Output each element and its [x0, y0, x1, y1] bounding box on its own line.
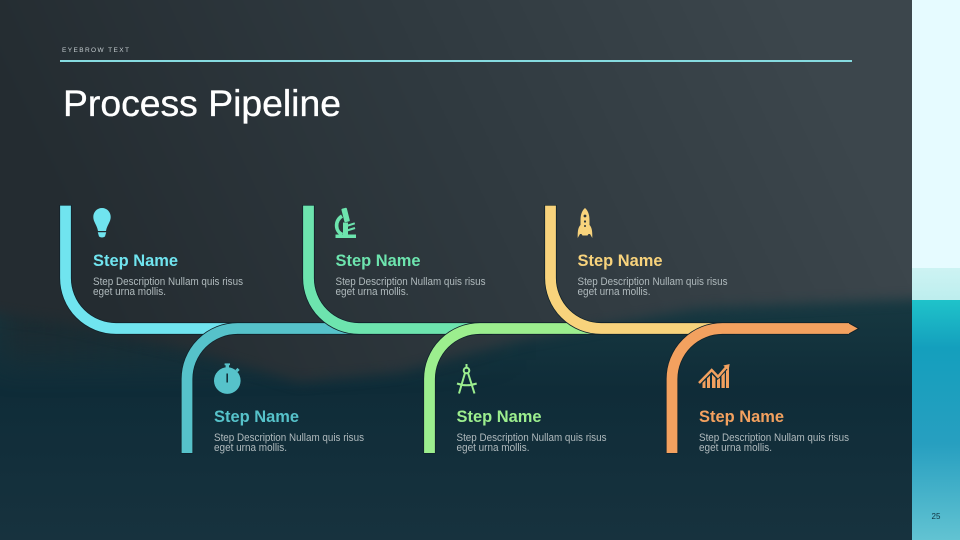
step 1: [93, 208, 244, 298]
step 4 description: eget urna mollis.: [456, 442, 530, 454]
step 3 description: eget urna mollis.: [336, 286, 408, 298]
pipe 2: teal: [187, 328, 372, 454]
step 4 name: Step Name: [456, 408, 542, 426]
pipe 6: orange with arrow tip: [672, 323, 859, 454]
icon: drafting compass: [457, 364, 477, 394]
eyebrow text: EYEBROW TEXT: [62, 47, 129, 54]
step 3: [336, 208, 486, 298]
step 6 description: eget urna mollis.: [699, 442, 772, 454]
right colour strip: [912, 0, 960, 540]
pipeline: [66, 205, 859, 454]
step 3 description: Step Description Nullam quis risus: [336, 276, 486, 288]
icon: growth chart: [699, 364, 730, 388]
icon: microscope: [336, 208, 356, 238]
header rule: [60, 60, 852, 62]
step 2 description: eget urna mollis.: [214, 442, 287, 454]
pipe 4: lime: [430, 328, 612, 454]
pipe 1: cyan: [66, 205, 250, 328]
step 4: [456, 364, 607, 454]
icon: light bulb: [93, 208, 111, 238]
step 1 description: Step Description Nullam quis risus: [93, 276, 244, 288]
title: Process Pipeline: [63, 83, 341, 124]
step 6 name: Step Name: [699, 408, 784, 426]
pipe 3: green: [308, 205, 492, 328]
step 4 description: Step Description Nullam quis risus: [456, 432, 607, 444]
step 2 name: Step Name: [214, 408, 299, 426]
icon: stopwatch: [214, 363, 241, 394]
step 1 description: eget urna mollis.: [93, 286, 166, 298]
step 6 description: Step Description Nullam quis risus: [699, 432, 850, 444]
step 5 description: Step Description Nullam quis risus: [578, 276, 728, 288]
step 2: [214, 363, 365, 454]
pipe 5: yellow: [550, 205, 735, 328]
page number: 25: [932, 512, 941, 521]
step 5 name: Step Name: [578, 252, 662, 270]
step 2 description: Step Description Nullam quis risus: [214, 432, 365, 444]
step 3 name: Step Name: [336, 252, 420, 270]
step 6: [699, 364, 850, 454]
icon: rocket: [578, 208, 592, 238]
step 5: [578, 208, 728, 298]
step 5 description: eget urna mollis.: [578, 286, 650, 298]
step 1 name: Step Name: [93, 252, 178, 270]
